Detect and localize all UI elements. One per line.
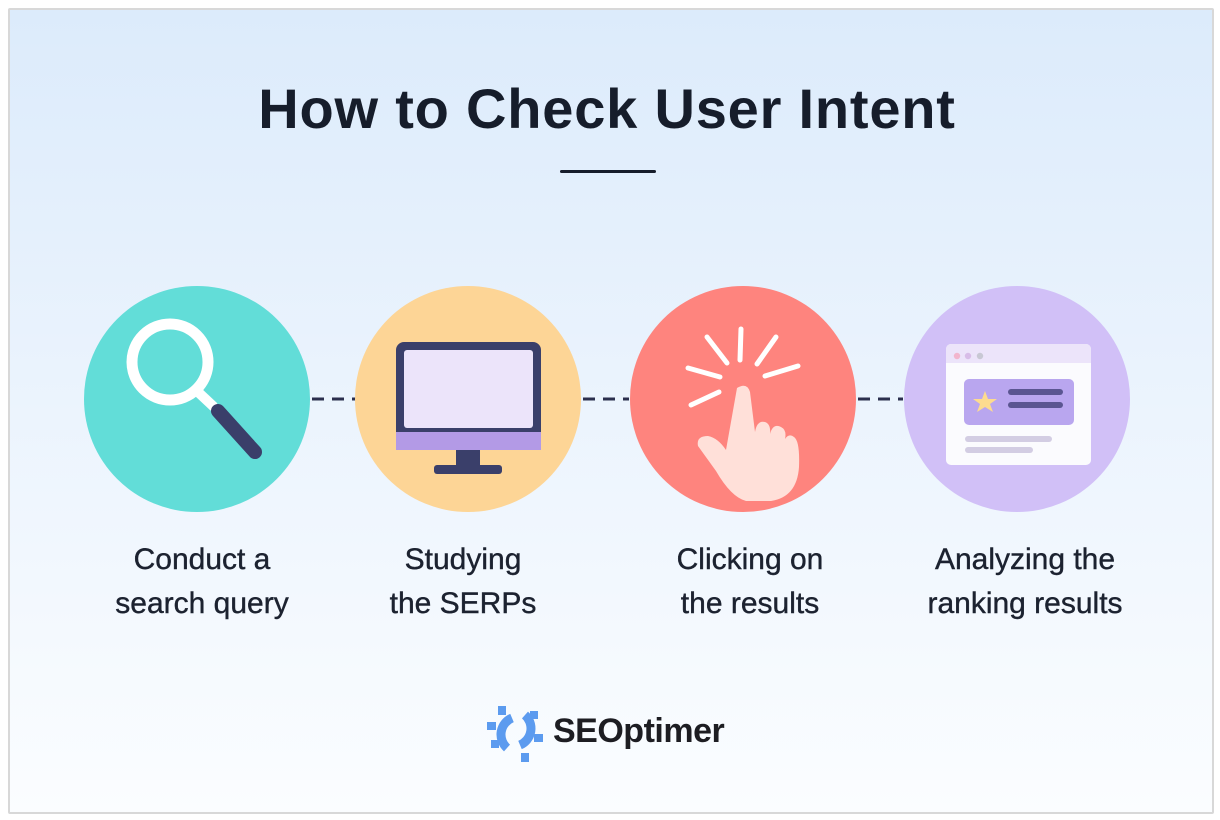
logo text: SEOptimer bbox=[553, 712, 724, 750]
icon: monitor bbox=[355, 286, 581, 512]
step 1 label: Conduct a bbox=[134, 543, 270, 576]
step 2 label: the SERPs bbox=[390, 587, 536, 620]
step 4 label: Analyzing the bbox=[935, 543, 1115, 576]
connector dashes bbox=[312, 398, 903, 400]
step 2 label: Studying bbox=[405, 543, 521, 576]
title underline bbox=[560, 170, 656, 173]
step 4 label bbox=[927, 543, 1123, 620]
step 2 label bbox=[390, 543, 536, 620]
icon: ranking browser bbox=[904, 286, 1130, 512]
icon: search magnifier bbox=[84, 286, 310, 512]
step 3 label bbox=[677, 543, 823, 620]
step 1 label: search query bbox=[115, 587, 289, 620]
logo icon: gears bbox=[487, 706, 543, 762]
icon: clicking hand bbox=[630, 286, 856, 512]
step 3 label: Clicking on bbox=[677, 543, 823, 576]
step 4 label: ranking results bbox=[927, 587, 1123, 620]
step 1 label bbox=[115, 543, 289, 620]
step 3 label: the results bbox=[681, 587, 819, 620]
title: How to Check User Intent bbox=[258, 77, 956, 140]
